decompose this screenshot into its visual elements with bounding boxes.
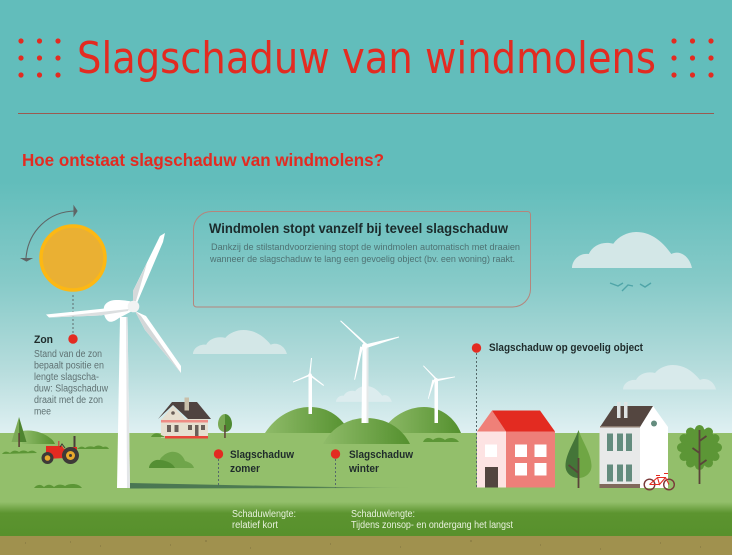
subheading: Hoe ontstaat slagschaduw van windmolens?	[22, 150, 384, 170]
title: Slagschaduw van windmolens	[77, 33, 656, 84]
big turbine	[46, 233, 181, 488]
caption: schaduwlengte kort	[232, 509, 296, 531]
info box	[194, 212, 530, 307]
label: gevoelig object: Slagschaduw op gevoelig object	[489, 342, 643, 354]
label: slagschaduw zomer	[230, 449, 294, 475]
zon label: Zon	[34, 334, 53, 346]
marker: slagschaduw winter	[331, 449, 340, 488]
middle turbine	[340, 320, 399, 423]
label: slagschaduw zomer: Slagschaduw	[230, 449, 294, 461]
small hill left	[22, 430, 55, 444]
zon description: duw: Slagschaduw	[34, 384, 109, 394]
zon description: lengte slagscha-	[34, 372, 99, 383]
caption: schaduwlengte kort: Schaduwlengte:	[232, 509, 296, 520]
sun pointer	[68, 295, 78, 344]
red house	[477, 410, 555, 488]
birds	[610, 283, 651, 291]
label: slagschaduw winter: Slagschaduw	[349, 449, 413, 461]
cloud top right	[572, 232, 692, 268]
caption: schaduwlengte lang	[351, 509, 513, 531]
ground	[0, 433, 732, 555]
label: slagschaduw winter	[348, 449, 413, 475]
cloud right	[623, 365, 716, 390]
tractor	[42, 436, 79, 464]
farm house	[158, 398, 211, 438]
cloud behind middle turbine	[336, 386, 392, 402]
blade up	[133, 233, 165, 306]
blade lower right	[135, 311, 181, 373]
small turbine right	[423, 366, 455, 423]
marker: gevoelig object	[472, 343, 481, 487]
zon description: bepaalt positie en	[34, 360, 104, 372]
caption: schaduwlengte kort: relatief kort	[232, 520, 278, 531]
zon description	[34, 349, 109, 418]
nacelle	[104, 300, 136, 322]
blade left	[46, 306, 129, 318]
arrow: sun movement	[22, 206, 77, 261]
zon description: Stand van de zon	[34, 349, 102, 360]
label: slagschaduw winter: winter	[348, 463, 380, 475]
small tree by farm	[218, 414, 232, 438]
small turbine left	[293, 358, 324, 414]
hub	[128, 301, 139, 312]
zon description: mee	[34, 406, 51, 418]
box body text: wanneer de slagschaduw te lang een gevoelig object (bv. een woning) raakt.	[209, 254, 515, 265]
white house	[600, 402, 668, 488]
caption: schaduwlengte lang: Schaduwlengte:	[351, 509, 415, 520]
big turbine shadow	[130, 483, 414, 488]
label: slagschaduw zomer: zomer	[230, 463, 261, 475]
bush front of farm	[149, 433, 194, 468]
marker: slagschaduw zomer	[214, 449, 223, 485]
box heading: Windmolen stopt vanzelf bij teveel slagschaduw	[209, 221, 508, 236]
bushes	[2, 438, 459, 488]
tower	[117, 317, 130, 488]
cloud behind big turbine	[193, 330, 287, 354]
background sky	[0, 0, 732, 433]
box body text	[209, 242, 520, 265]
title dots right	[671, 38, 714, 78]
sun	[41, 226, 105, 290]
round tree	[677, 425, 722, 484]
caption: schaduwlengte lang: Tijdens zonsop- en ondergang het langst	[351, 520, 513, 531]
hills	[265, 407, 461, 444]
title dots left	[18, 38, 61, 78]
bicycle	[644, 474, 674, 490]
zon description: draait met de zon	[34, 395, 103, 406]
pine tree left	[12, 417, 26, 447]
teardrop tree	[566, 430, 592, 488]
box body text: Dankzij de stilstandvoorziening stopt de windmolen automatisch met draaien	[211, 242, 520, 253]
